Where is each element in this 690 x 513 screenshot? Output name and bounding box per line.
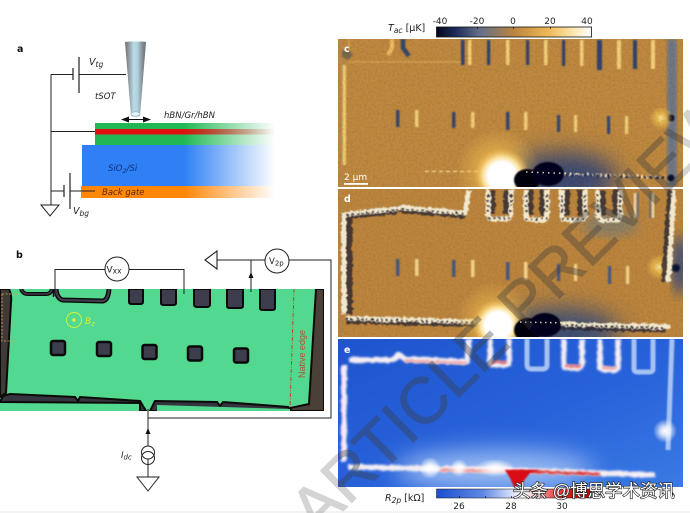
arrow: scan direction [121,116,151,122]
panel label e: e [344,345,350,356]
mid contact pairs [396,259,629,284]
colorbar: Tac: 20 [544,17,556,27]
colorbar: Tac: T [388,23,395,34]
texture [338,39,683,187]
colorbar: R2p: R [385,493,392,504]
label Vbg: V [73,206,80,217]
label Vtg: V [89,57,96,68]
panel label b: b [16,250,23,261]
panel label d: d [344,194,351,205]
label SiO2/Si: 2 [122,167,127,175]
colorbar: Tac: -20 [470,17,485,27]
warm spot right [650,108,672,128]
panel c: thermal map [338,39,683,187]
warm halo [458,287,530,337]
page footer strip [0,511,690,513]
circuit Vxx [55,257,184,296]
panel label c: c [344,44,350,55]
cold region [500,308,620,356]
layer: back gate [81,186,275,198]
circuit V2p [148,249,331,418]
cold spots [513,312,562,337]
colorbar: Tac: 0 [510,17,516,27]
colorbar: R2p: 2p [392,496,401,505]
panel d: thermal map [338,189,683,337]
colorbar: R2p: 26 [453,502,465,512]
source watermark: Chinese caption: 头条 @博思学术资讯 [513,481,675,501]
right edge band [667,39,677,187]
current source Idc [121,409,159,491]
native edge line [290,289,294,407]
circuit Vxx: V [106,266,113,276]
label Vbg: bg [80,209,89,218]
contact squares [51,341,248,362]
colorbar: Tac: [µK] [403,23,425,34]
circuit Vxx: xx [113,266,122,276]
label Bz: B [85,317,91,327]
colorbar: R2p [385,489,592,512]
label tSOT: tSOT [95,92,116,102]
wiggly edges: dark speckle [346,195,665,328]
layer: hBN/Gr/hBN stack [95,123,275,145]
faint fingers [527,339,672,450]
top finger streaks [461,40,637,70]
colorbar: R2p: [kΩ] [401,493,424,504]
icon: Bz field [66,312,82,328]
panel a: device schematic [17,42,275,218]
colorbar: R2p: 30 [556,502,568,512]
icon: tSOT tip [125,42,146,117]
panel b: device micrograph and measurement circuit [0,249,331,491]
circuit V2p: 2p [275,260,284,268]
colorbar: Tac: ac [394,26,403,35]
bottom trenches [0,394,146,411]
hot spot [473,301,522,337]
texture [338,189,683,337]
cold spots [514,162,564,191]
label Native edge: Native edge [297,330,307,378]
colorbar: R2p: 28 [505,502,517,512]
wiggly edges: white [344,190,674,327]
label SiO2/Si: /Si [126,164,138,174]
top fingers [129,289,275,310]
red heated segments [405,361,616,474]
label Back gate: Back gate [102,188,145,198]
panel e: resistance map [338,339,683,490]
circuit V2p: V [269,257,275,267]
micrograph [0,289,324,411]
label Bz: z [90,320,95,328]
wiggly edges: dark shadow [346,190,671,329]
colorbar: Tac [388,17,593,37]
colorbar: Tac: -40 [433,17,448,27]
colorbar: Tac: 40 [581,17,593,27]
current source Idc: dc [124,454,132,462]
cold region [506,152,618,204]
current source Idc: I [121,451,124,461]
hot spot [476,150,528,187]
label Vtg: tg [96,60,103,69]
label SiO2/Si: SiO [108,164,122,174]
lighter region at bottom [395,450,595,490]
label hBN/Gr/hBN: hBN/Gr/hBN [164,111,216,121]
hot glows [420,458,440,478]
mid contact pairs [396,110,610,134]
red blob [505,470,540,487]
panel label a: a [17,44,23,55]
left U-shaped channels [21,289,109,301]
bottom edge speckle [425,171,500,172]
white edge lines [344,339,655,475]
circuit wiring [41,57,126,216]
warm spot right [648,256,665,278]
scale bar: 2 µm [344,173,367,183]
layer: SiO2/Si [82,145,275,186]
left edge and upper structure [342,39,655,165]
warm halo [462,134,537,187]
dashed outline [2,294,18,341]
